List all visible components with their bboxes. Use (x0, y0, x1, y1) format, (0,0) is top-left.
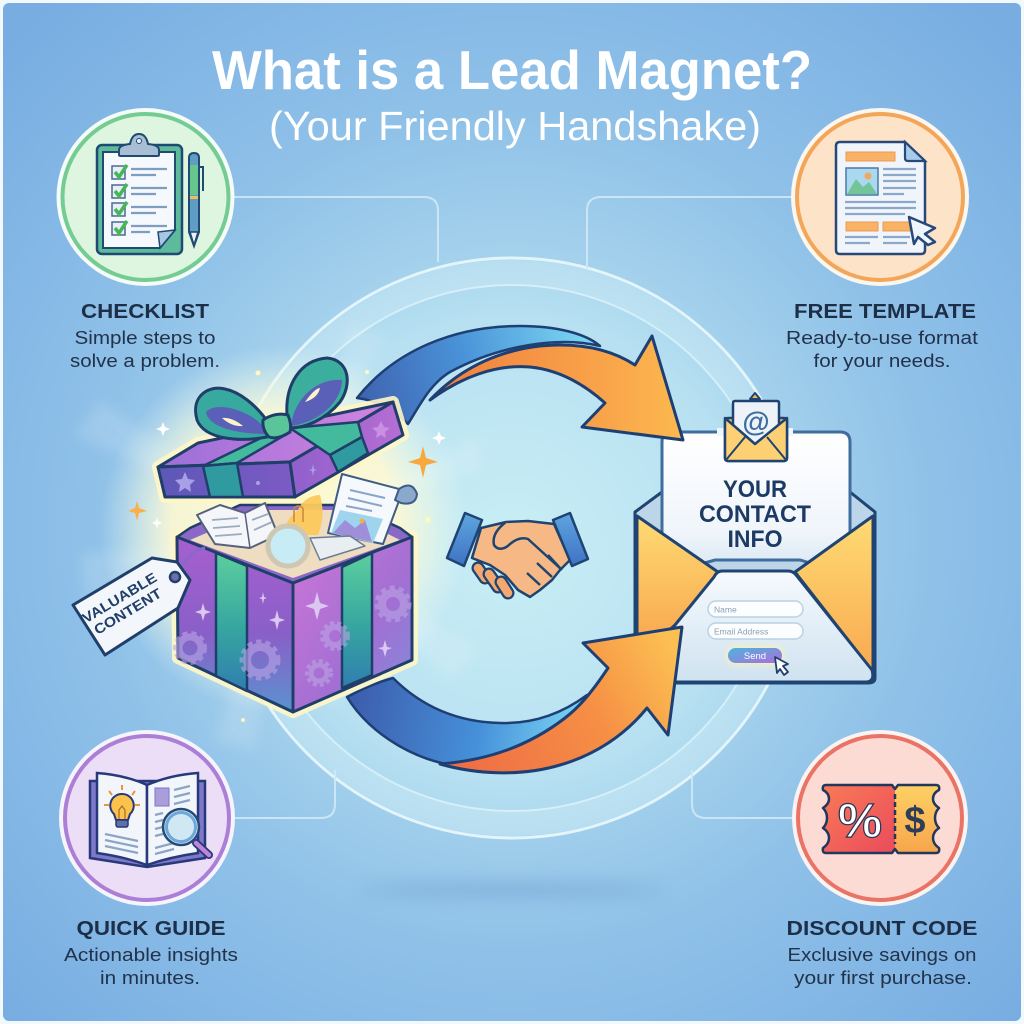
content: open book (197, 503, 278, 548)
lid top face (158, 402, 393, 467)
connector lines (232, 197, 792, 818)
name field (708, 601, 803, 617)
guide description: Actionable insights (64, 944, 238, 965)
subtitle: (Your Friendly Handshake) (269, 103, 761, 149)
panel: discount code (786, 730, 978, 988)
checklist heading: CHECKLIST (81, 300, 210, 323)
checklist description: Simple steps to (74, 327, 216, 348)
guide description: in minutes. (100, 967, 200, 988)
large orange sparkle (408, 446, 438, 478)
lid front face (158, 462, 295, 497)
panel: checklist (56, 108, 234, 371)
icon: small envelope with at sign: @ (742, 406, 770, 437)
icon: coupon ticket (823, 785, 939, 853)
bow right loop (287, 358, 347, 428)
arrow: top blue swoosh (357, 326, 600, 424)
icon: open book (90, 773, 205, 867)
tag label: CONTENT (91, 585, 165, 638)
content: bulb (285, 495, 323, 535)
box right face (293, 537, 412, 712)
panel: quick guide (59, 730, 238, 988)
left yellow flap (637, 516, 718, 640)
content: scroll (328, 474, 417, 544)
ground shadow (357, 883, 667, 897)
name field: Name (714, 604, 737, 614)
discount heading: DISCOUNT CODE (786, 917, 978, 940)
content: magnifier (268, 526, 308, 566)
send button (726, 646, 784, 665)
tag body (73, 558, 190, 655)
value tag (73, 548, 205, 655)
checklist badge (56, 108, 234, 286)
icon: clipboard (97, 134, 182, 254)
letter text: YOUR (723, 476, 787, 503)
arrow: bottom blue swoosh (347, 678, 587, 767)
icon: template document (836, 142, 925, 254)
letter sheet (662, 432, 850, 575)
email field (708, 623, 803, 639)
arrow: top orange (430, 336, 683, 440)
send button: Send (744, 651, 766, 662)
front flap (636, 571, 873, 682)
green stripes (216, 553, 372, 691)
template badge (791, 108, 969, 286)
open gift box (73, 358, 417, 712)
tag string (178, 548, 205, 570)
template heading: FREE TEMPLATE (794, 300, 976, 323)
letter text: CONTACT (699, 501, 811, 528)
gift halo outline (158, 402, 412, 712)
icon: cursor (909, 217, 935, 245)
content: paper roll (310, 536, 365, 560)
template description: for your needs. (814, 350, 950, 371)
glow behind gift (75, 325, 480, 750)
icon: coupon ticket: % (838, 795, 882, 848)
small orange sparkle (128, 501, 147, 521)
bow left loop (196, 388, 267, 439)
icon: coupon ticket: $ (904, 800, 926, 842)
envelope back (635, 492, 875, 683)
email field: Email Address (714, 626, 768, 636)
icon: pen (189, 153, 203, 246)
arrow: bottom orange (440, 627, 682, 773)
box contents (197, 474, 417, 566)
checklist description: solve a problem. (70, 350, 220, 371)
guide badge (59, 730, 235, 906)
right cuff (553, 513, 588, 566)
star decorations (195, 592, 392, 657)
bow knot (263, 414, 291, 438)
gear decorations (175, 588, 409, 685)
title: What is a Lead Magnet? (212, 39, 812, 101)
box left face (177, 537, 293, 712)
box decorations (175, 588, 409, 685)
template description: Ready-to-use format (786, 327, 978, 348)
icon: magnifier (163, 809, 209, 855)
icon: light bulb (104, 785, 140, 827)
box interior (177, 505, 412, 583)
bow (196, 358, 347, 439)
discount badge (792, 730, 968, 906)
envelope (635, 432, 875, 683)
icon: small envelope with at sign (717, 393, 793, 461)
lid stars (175, 421, 390, 492)
panel: free template (786, 108, 978, 371)
tag label: VALUABLE (79, 569, 159, 626)
lid right face (290, 402, 403, 497)
right yellow flap (795, 516, 873, 672)
left cuff (447, 513, 482, 566)
white sparkles (152, 422, 446, 529)
lid ribbons (203, 422, 368, 497)
sparkles (128, 370, 446, 722)
letter text: INFO (728, 526, 782, 553)
icon: handshake (447, 513, 588, 597)
clasped hands (472, 521, 570, 597)
discount description: Exclusive savings on (788, 944, 976, 965)
hand (472, 521, 570, 597)
cursor (775, 657, 788, 675)
guide heading: QUICK GUIDE (76, 917, 226, 940)
yellow dots (241, 370, 431, 722)
discount description: your first purchase. (794, 967, 972, 988)
fingers (478, 568, 508, 593)
central ring (222, 258, 802, 838)
